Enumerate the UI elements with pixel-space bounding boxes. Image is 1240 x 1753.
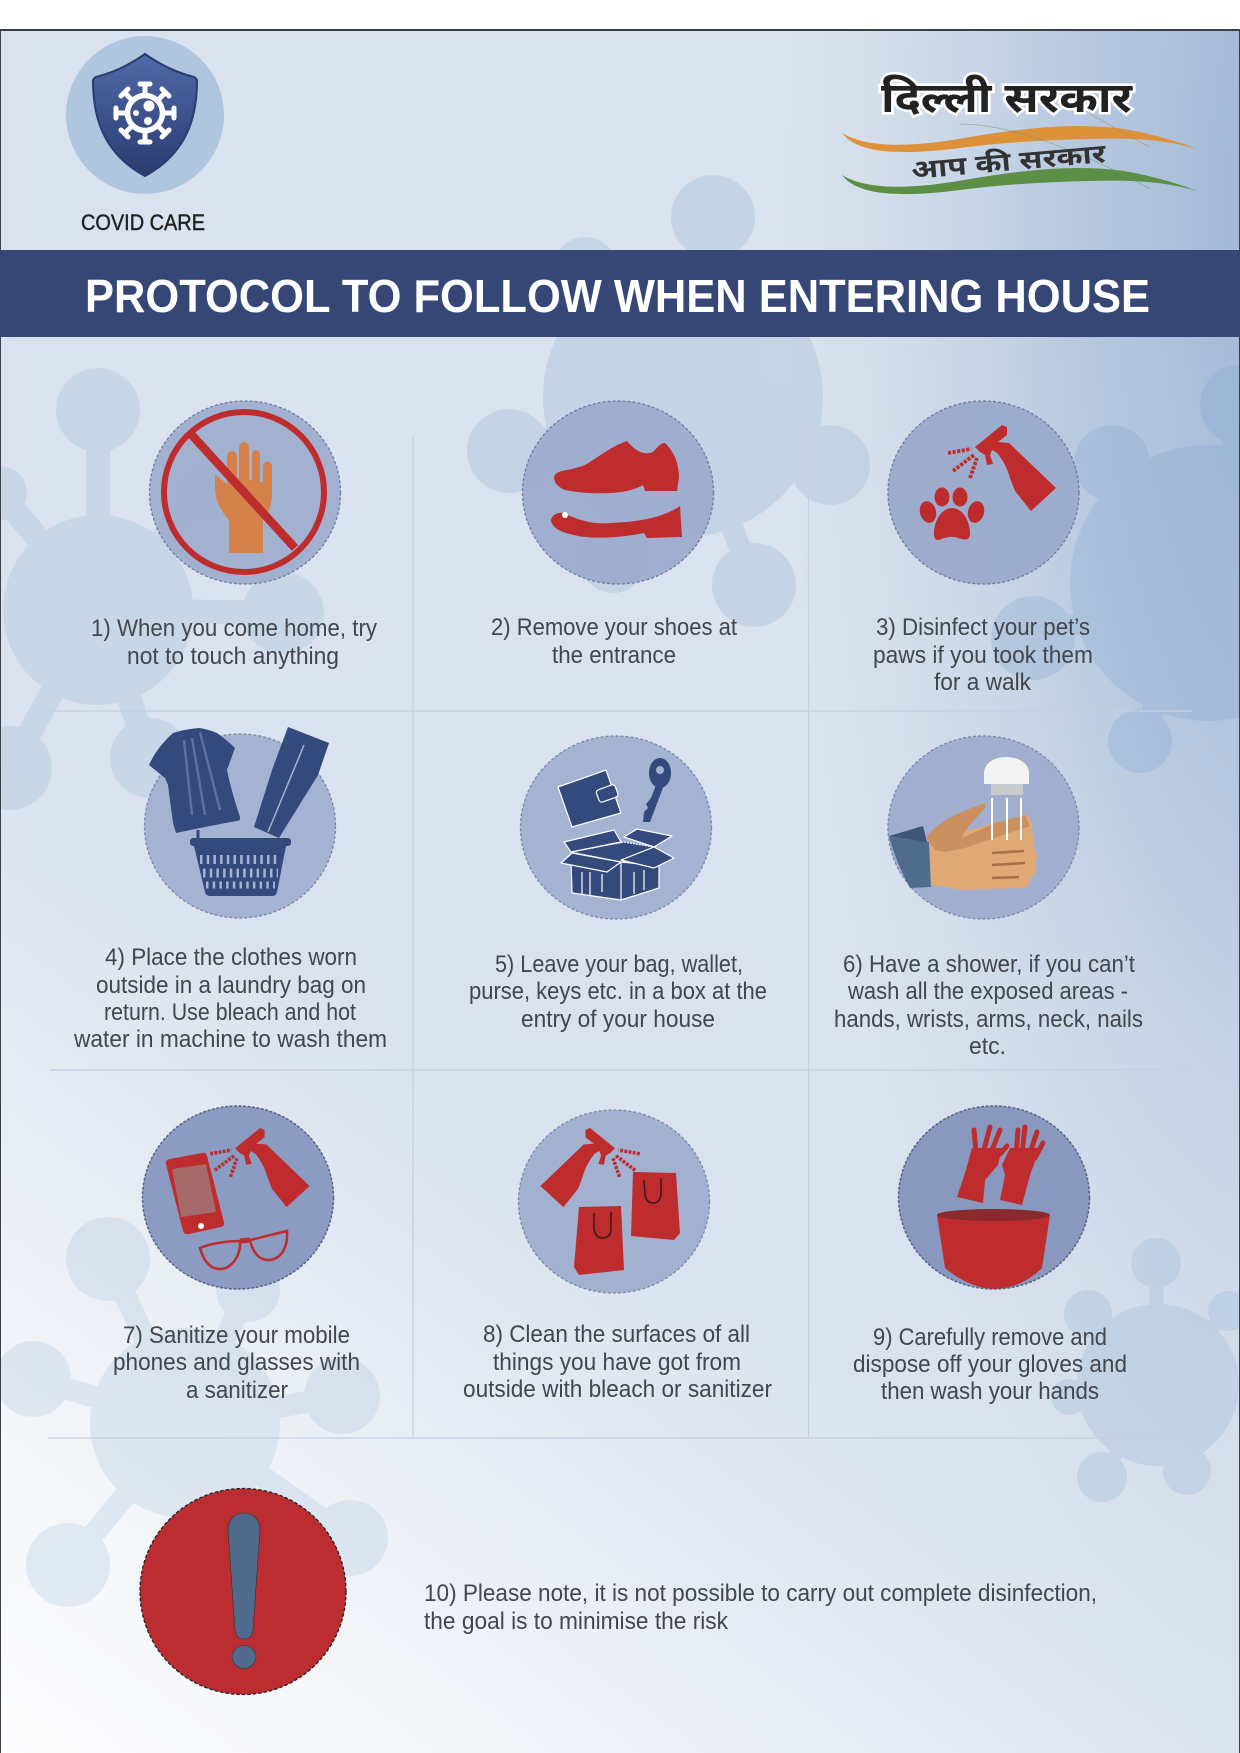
icon: hand — [215, 442, 272, 553]
text 2 — [491, 614, 737, 669]
icon: trousers — [254, 727, 329, 838]
text 1 — [91, 615, 378, 670]
icon: wallet — [558, 770, 621, 827]
icon: bucket — [937, 1209, 1050, 1289]
icon: shower head — [984, 757, 1029, 795]
text 5: purse, keys etc. in a box at the — [469, 978, 767, 1005]
logo headline: दिल्ली सरकार — [881, 74, 1134, 121]
logo tagline: आप की सरकार — [910, 138, 1107, 185]
text 10: the goal is to minimise the risk — [424, 1608, 729, 1635]
icon: laundry basket — [190, 830, 291, 896]
virus: upper centre — [467, 175, 870, 627]
icon: shield — [93, 54, 197, 176]
icon: phone — [166, 1153, 224, 1234]
text 7: 7) Sanitize your mobile — [123, 1322, 350, 1349]
icon: spray bottle — [540, 1128, 640, 1207]
text 5 — [469, 951, 767, 1033]
text 9: dispose off your gloves and — [853, 1351, 1127, 1378]
icon: shirt — [149, 728, 240, 833]
icon: warning circle — [140, 1488, 346, 1694]
text 4: 4) Place the clothes worn — [105, 944, 357, 971]
text 7 — [113, 1322, 360, 1404]
text 8 — [463, 1321, 772, 1403]
text 6: etc. — [969, 1033, 1006, 1060]
logo accent strokes — [960, 114, 1150, 189]
text 6: 6) Have a shower, if you can’t — [843, 951, 1135, 978]
text 10 — [424, 1580, 1097, 1635]
panel 1: do not touch — [91, 401, 378, 670]
panel 7: sanitize phone and glasses — [113, 1106, 360, 1404]
panel 5: box at entry — [469, 736, 767, 1033]
panel 8: clean bags — [463, 1110, 772, 1403]
icon: key — [643, 758, 671, 822]
icon: virus on shield — [116, 84, 174, 142]
icon: open box — [561, 829, 674, 900]
text 9: 9) Carefully remove and — [873, 1324, 1107, 1351]
panel 4: laundry — [73, 727, 387, 1053]
text 8: things you have got from — [493, 1349, 741, 1376]
text 9: then wash your hands — [881, 1378, 1099, 1405]
text 5: entry of your house — [521, 1006, 715, 1033]
icon: paw — [917, 488, 987, 540]
logo: covid care shield — [66, 36, 224, 235]
logo: delhi government — [842, 74, 1197, 194]
title banner — [0, 250, 1240, 337]
text 3: paws if you took them — [873, 642, 1093, 669]
text 9 — [853, 1324, 1127, 1405]
panel 2: shoes — [491, 401, 737, 669]
text 3 — [873, 614, 1093, 696]
text 3: for a walk — [934, 669, 1032, 696]
white strip above the frame — [0, 0, 1240, 29]
virus: right — [991, 365, 1240, 773]
virus: left — [0, 368, 324, 810]
label: covid care: COVID CARE — [81, 210, 205, 235]
text 2: the entrance — [552, 642, 676, 669]
virus: lower left — [0, 1217, 388, 1607]
text 5: 5) Leave your bag, wallet, — [495, 951, 743, 978]
text 7: a sanitizer — [186, 1377, 288, 1404]
text 7: phones and glasses with — [113, 1349, 360, 1376]
panel 6: shower — [834, 736, 1143, 1060]
virus: lower right — [1051, 1238, 1240, 1502]
icon: hand under water — [889, 803, 1037, 890]
text 4: return. Use bleach and hot — [104, 999, 356, 1026]
title: PROTOCOL TO FOLLOW WHEN ENTERING HOUSE — [85, 270, 1150, 322]
text 4: water in machine to wash them — [73, 1026, 387, 1053]
text 3: 3) Disinfect your pet’s — [876, 614, 1090, 641]
panel 9: gloves — [853, 1106, 1127, 1405]
icon: gloves — [957, 1127, 1043, 1205]
text 6 — [834, 951, 1143, 1060]
text 1: 1) When you come home, try — [91, 615, 378, 642]
icon: spray bottle — [948, 425, 1056, 511]
text 4 — [73, 944, 387, 1053]
text 4: outside in a laundry bag on — [96, 972, 366, 999]
panel 10: warning note — [140, 1488, 1097, 1694]
icon: shopping bag back — [631, 1172, 680, 1240]
text 6: hands, wrists, arms, neck, nails — [834, 1006, 1143, 1033]
text 1: not to touch anything — [127, 643, 339, 670]
text 8: 8) Clean the surfaces of all — [483, 1321, 750, 1348]
icon: shoe — [554, 441, 679, 493]
text 6: wash all the exposed areas - — [847, 978, 1128, 1005]
text 2: 2) Remove your shoes at — [491, 614, 737, 641]
icon: prohibition sign — [164, 412, 324, 572]
icon: spray bottle — [210, 1128, 310, 1207]
text 10: 10) Please note, it is not possible to carry out complete disinfection, — [424, 1580, 1097, 1607]
panel 3: pet paws — [873, 401, 1093, 696]
icon: glasses — [200, 1231, 287, 1269]
logo swoosh: green — [842, 168, 1197, 194]
icon: water lines — [992, 798, 1021, 840]
icon: flat shoe — [551, 506, 682, 538]
text 8: outside with bleach or sanitizer — [463, 1376, 772, 1403]
logo swoosh: orange — [842, 126, 1197, 152]
icon: shopping bag front — [574, 1206, 624, 1275]
